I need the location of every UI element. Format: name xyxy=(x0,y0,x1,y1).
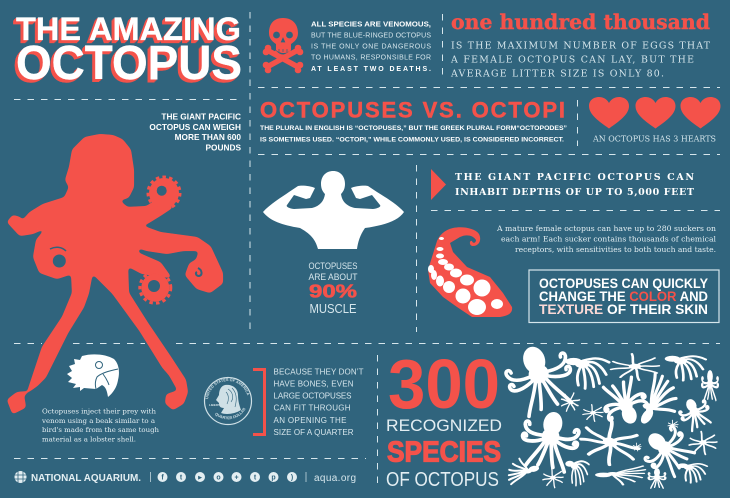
beak text: bird's made from the same tough xyxy=(42,426,159,434)
callout: colour and texture: TEXTURE OF THEIR SKIN xyxy=(539,302,708,317)
footer social icons: p xyxy=(271,474,276,482)
heading: 300 recognized species: OF OCTOPUS xyxy=(386,469,499,491)
giant pacific weight note: THE GIANT PACIFIC xyxy=(161,112,241,122)
suckers text: each arm! Each sucker contains thousands of chemical xyxy=(501,234,717,244)
icon: quarter coin xyxy=(204,376,252,426)
eggs text: A FEMALE OCTOPUS CAN LAY, BUT THE xyxy=(450,54,694,66)
suckers text: receptors, with sensitivities to both touch and taste. xyxy=(515,245,716,254)
depth text xyxy=(455,172,694,198)
quarter text: SIZE OF A QUARTER xyxy=(274,428,354,437)
footer social icons: t xyxy=(180,474,183,482)
heading: 300 recognized species xyxy=(386,345,502,491)
giant pacific weight note: MORE THAN 600 xyxy=(175,132,241,142)
venom text: TO HUMANS, RESPONSIBLE FOR xyxy=(311,54,431,62)
plural text: THE PLURAL IN ENGLISH IS “OCTOPUSES,” BUT THE GREEK PLURAL FORM“OCTOPODES” xyxy=(260,125,567,132)
depth text: THE GIANT PACIFIC OCTOPUS CAN xyxy=(455,172,694,183)
heading: 300 recognized species: 300 xyxy=(388,345,500,423)
icon: three hearts xyxy=(589,97,720,128)
venom text xyxy=(311,22,431,73)
hearts caption: AN OCTOPUS HAS 3 HEARTS xyxy=(592,134,716,144)
footer social icons: f xyxy=(161,474,164,482)
plural text xyxy=(260,125,567,144)
icon: tentacle with suckers xyxy=(428,227,512,317)
quarter text xyxy=(274,368,364,437)
beak text xyxy=(41,408,159,444)
quarter text: AN OPENING THE xyxy=(274,416,346,425)
venom text: IS THE ONLY ONE DANGEROUS xyxy=(311,44,431,50)
callout: colour and texture xyxy=(529,270,719,322)
eggs text: AVERAGE LITTER SIZE IS ONLY 80. xyxy=(450,68,664,80)
beak text: Octopuses inject their prey with xyxy=(42,408,156,416)
giant pacific weight note: OCTOPUS CAN WEIGH xyxy=(149,122,241,132)
footer url: aqua.org xyxy=(314,473,356,484)
quarter text: LARGE OCTOPUSES xyxy=(274,392,352,400)
arrow: triangle xyxy=(431,169,446,200)
giant pacific weight note xyxy=(149,112,241,152)
quarter text: BECAUSE THEY DON’T xyxy=(274,368,364,376)
footer social icons: + xyxy=(234,474,239,482)
callout: colour and texture: CHANGE THE COLOR AND xyxy=(539,289,708,304)
plural text: IS SOMETIMES USED. “OCTOPI,” WHILE COMMONLY USED, IS CONSIDERED INCORRECT. xyxy=(260,136,564,144)
title xyxy=(16,11,242,90)
quarter text: HAVE BONES, EVEN xyxy=(274,380,354,388)
footer logo: NATIONAL AQUARIUM. xyxy=(31,473,141,484)
quarter text: CAN FIT THROUGH xyxy=(274,404,351,412)
bracket xyxy=(253,370,264,434)
eggs text xyxy=(450,40,711,80)
icon: skull and crossbones xyxy=(263,18,303,73)
icon: parrot head xyxy=(67,354,119,397)
icon: muscle man xyxy=(263,171,404,249)
heading: one hundred thousand: one hundred thousand xyxy=(451,10,710,34)
large octopus silhouette xyxy=(8,135,222,413)
footer social icons: t xyxy=(254,474,257,482)
title: THE AMAZING xyxy=(16,11,241,47)
octopus sucker rings xyxy=(50,177,202,303)
eggs text: IS THE MAXIMUM NUMBER OF EGGS THAT xyxy=(451,40,711,52)
icon: octopus species collage xyxy=(500,337,718,488)
heading: octopuses vs octopi: OCTOPUSES VS. OCTOPI xyxy=(260,98,565,122)
footer social icons xyxy=(150,472,306,482)
giant pacific weight note: POUNDS xyxy=(206,142,241,152)
suckers text: A mature female octopus can have up to 280 suckers on xyxy=(496,224,716,233)
muscle text: ARE ABOUT xyxy=(308,272,358,283)
muscle text: 90% xyxy=(309,282,357,302)
icon: quarter coin: LIBERTY xyxy=(209,403,222,407)
title: OCTOPUS xyxy=(16,37,242,90)
icon: quarter coin: QUARTER DOLLAR xyxy=(215,408,246,420)
heading: 300 recognized species: SPECIES xyxy=(387,436,501,468)
suckers text xyxy=(496,224,717,254)
callout: colour and texture: OCTOPUSES CAN QUICKLY xyxy=(539,276,708,291)
footer social icons: o xyxy=(216,474,221,482)
beak text: material as a lobster shell. xyxy=(42,436,136,444)
icon: quarter coin: UNITED STATES OF AMERICA xyxy=(206,378,250,399)
venom text: ALL SPECIES ARE VENOMOUS, xyxy=(311,22,431,28)
beak text: venom using a beak similar to a xyxy=(41,417,155,425)
depth text: INHABIT DEPTHS OF UP TO 5,000 FEET xyxy=(455,187,694,198)
venom text: BUT THE BLUE-RINGED OCTOPUS xyxy=(311,32,431,40)
footer social icons: ▸ xyxy=(197,474,202,482)
muscle text: OCTOPUSES xyxy=(308,261,358,272)
muscle text: MUSCLE xyxy=(310,302,356,316)
venom text: AT LEAST TWO DEATHS. xyxy=(311,66,431,73)
heading: 300 recognized species: RECOGNIZED xyxy=(386,417,502,435)
footer social icons: ) xyxy=(291,474,293,482)
muscle text xyxy=(308,261,358,316)
